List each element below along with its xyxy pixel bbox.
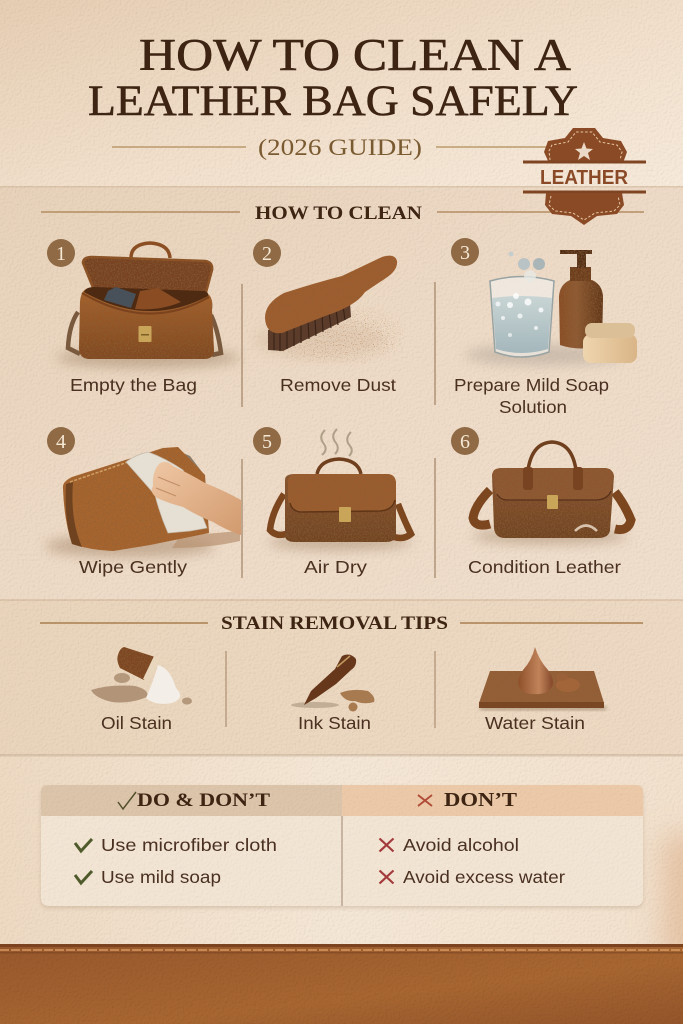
do header: DO & DON’T <box>137 790 270 811</box>
divider 6 <box>434 651 436 728</box>
icon: pen and ink blot <box>291 655 374 712</box>
section heading: stain removal tips: STAIN REMOVAL TIPS <box>221 613 448 634</box>
label: Prepare Mild Soap <box>454 375 609 395</box>
divider 3 <box>241 459 243 578</box>
step 1: empty the bag <box>47 239 240 395</box>
panel: ink stain <box>291 655 374 733</box>
don't item: excess water: Avoid excess water <box>403 867 565 887</box>
number badge 1 <box>47 239 75 267</box>
icon: brush <box>254 256 403 363</box>
number badge 1: 1 <box>56 243 66 265</box>
divider 4 <box>434 458 436 578</box>
number badge 5 <box>253 427 281 455</box>
panel: oil stain <box>91 647 192 733</box>
divider 1 <box>241 284 243 407</box>
number badge 6: 6 <box>460 431 470 453</box>
label: Wipe Gently <box>79 557 187 577</box>
icon: water drop on leather <box>479 647 606 710</box>
table body <box>41 785 643 908</box>
divider 5 <box>225 651 227 727</box>
icon: hand wiping bag <box>45 447 241 557</box>
don't header <box>418 789 518 811</box>
divider 2 <box>434 282 436 405</box>
step 4: wipe gently <box>45 427 241 577</box>
label <box>454 375 609 417</box>
step 3: prepare mild soap solution <box>451 238 637 417</box>
do and don't table <box>41 785 643 908</box>
icon: steam lines <box>321 429 352 456</box>
do item: mild soap: Use mild soap <box>101 867 221 887</box>
leather badge <box>523 128 646 225</box>
label: Air Dry <box>304 557 367 577</box>
label: Ink Stain <box>298 713 371 733</box>
icon: drying bag <box>268 459 412 550</box>
title <box>88 30 578 125</box>
don't column <box>380 789 565 887</box>
panel: water stain <box>479 647 606 733</box>
label: Oil Stain <box>101 713 172 733</box>
number badge 5: 5 <box>262 431 272 453</box>
number badge 4 <box>47 427 75 455</box>
number badge 3: 3 <box>460 242 470 264</box>
label: Empty the Bag <box>70 375 197 395</box>
leather footer band <box>0 944 683 1024</box>
number badge 2: 2 <box>262 243 272 265</box>
icon: conditioned bag <box>472 442 631 544</box>
title: LEATHER BAG SAFELY <box>88 78 578 125</box>
number badge 2 <box>253 239 281 267</box>
number badge 3 <box>451 238 479 266</box>
label: Condition Leather <box>468 557 621 577</box>
don't item: alcohol: Avoid alcohol <box>403 835 519 855</box>
number badge 6 <box>451 427 479 455</box>
do item: microfiber cloth: Use microfiber cloth <box>101 835 277 855</box>
label: Water Stain <box>485 713 585 733</box>
icon: glass, bottle and jar <box>465 250 637 365</box>
step 2: remove dust <box>253 239 403 395</box>
number badge 4: 4 <box>56 431 66 453</box>
step 6: condition leather <box>451 427 631 577</box>
section heading: how to clean: HOW TO CLEAN <box>255 203 422 224</box>
icon: oil spill and powder <box>91 647 192 704</box>
title: HOW TO CLEAN A <box>139 30 572 80</box>
don't header: DON’T <box>444 789 518 811</box>
leather badge: LEATHER <box>540 167 629 189</box>
do column <box>75 790 277 887</box>
label: Solution <box>499 397 567 417</box>
label: Remove Dust <box>280 375 396 395</box>
subtitle: 2026 guide: (2026 GUIDE) <box>258 135 422 160</box>
step 5: air dry <box>253 427 412 577</box>
icon: open bag <box>56 243 240 368</box>
